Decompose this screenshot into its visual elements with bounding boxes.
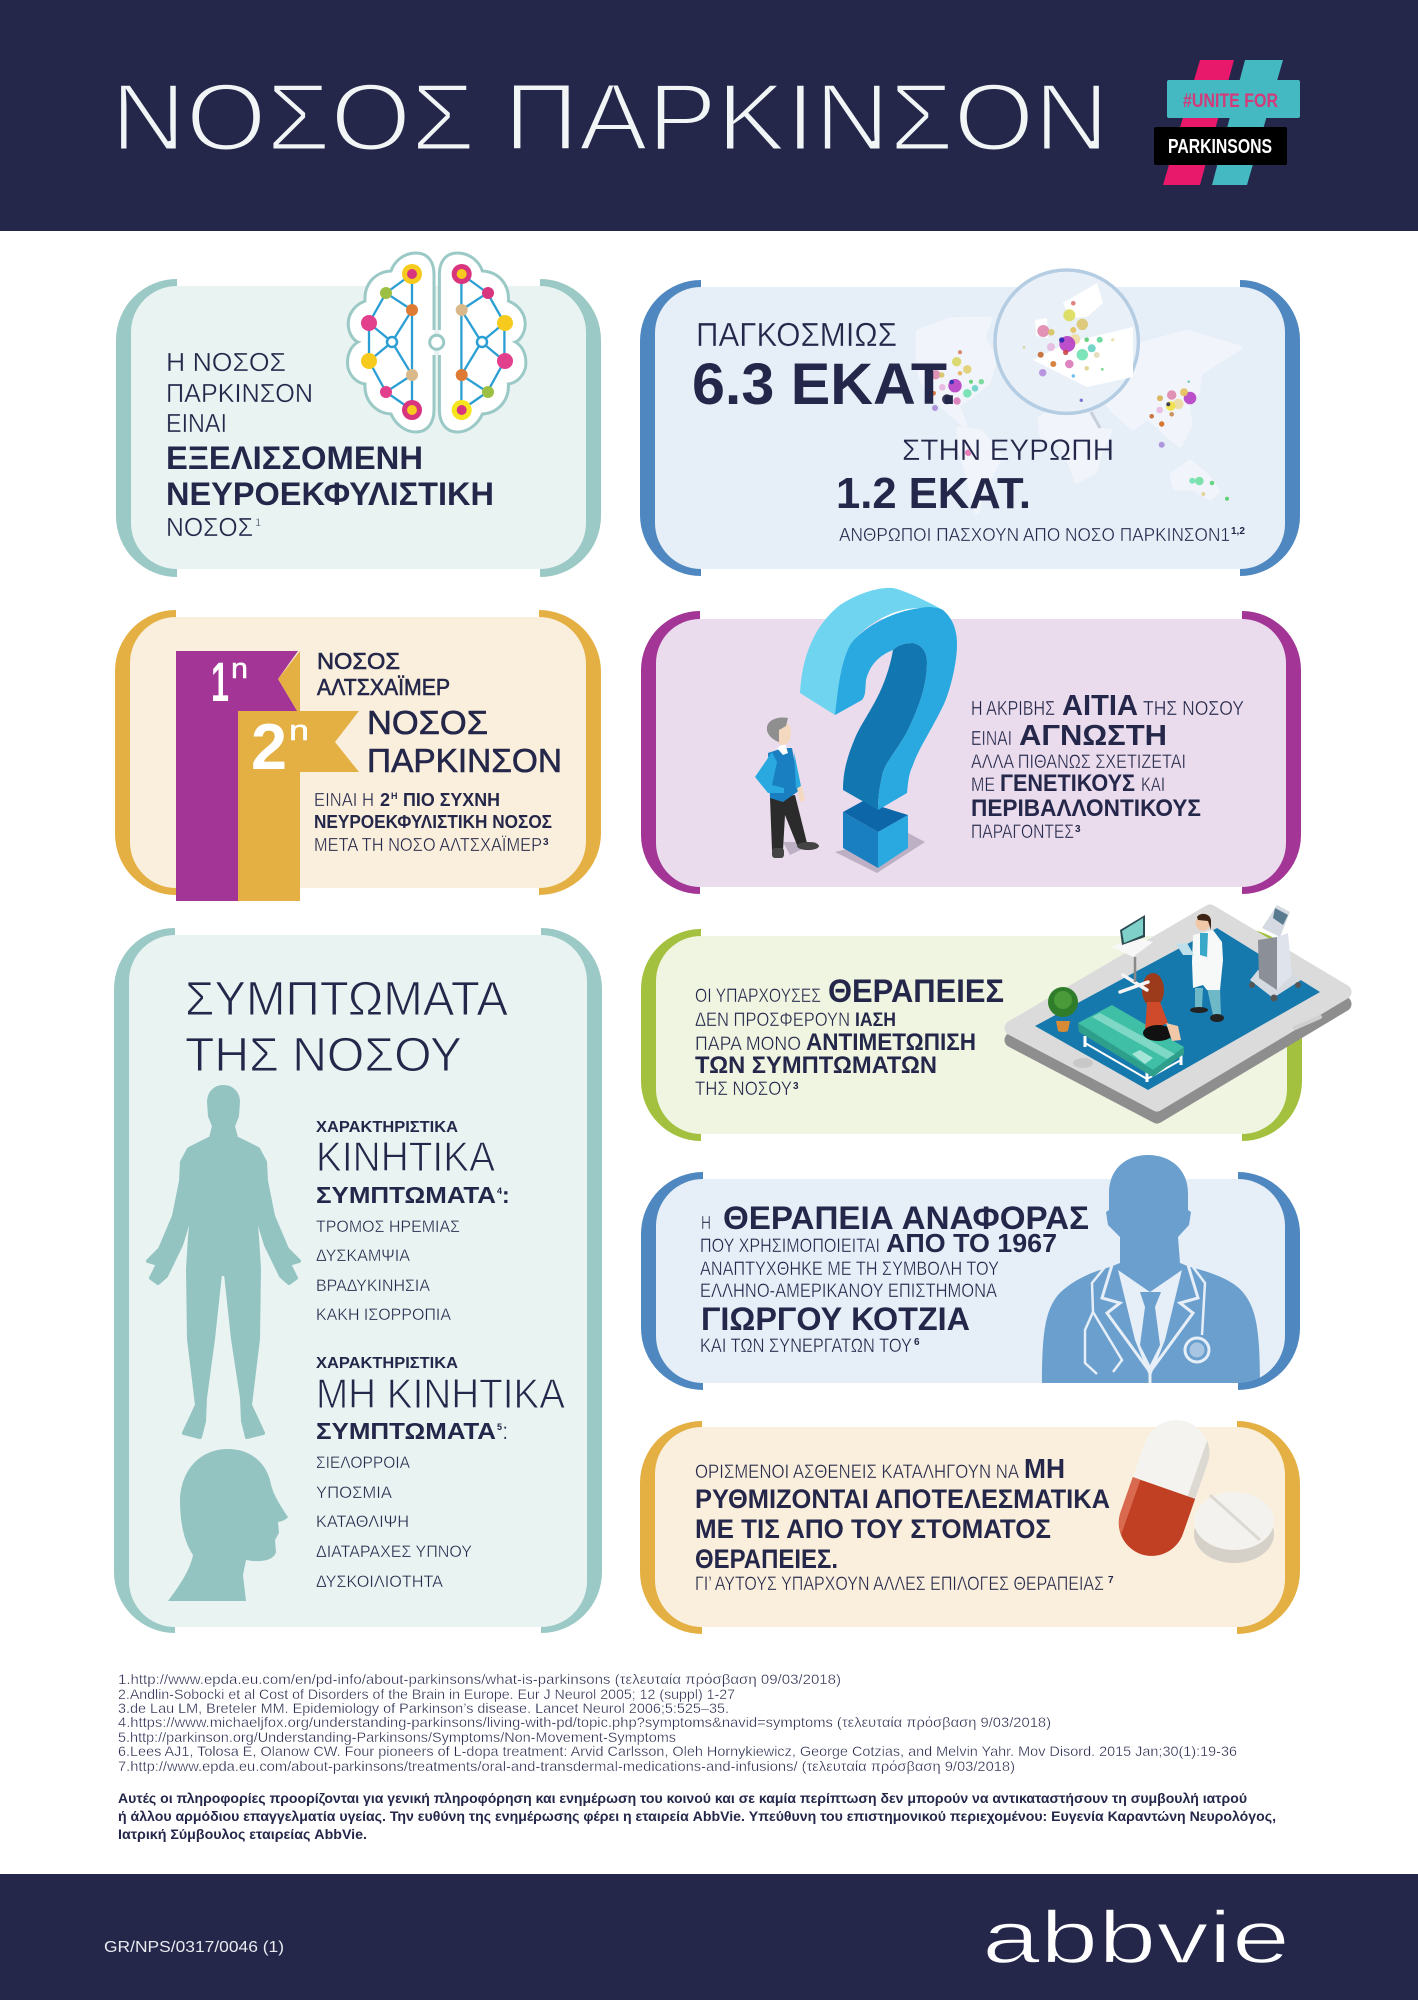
text block: prevalence figures: 6.3 ΕΚΑΤ. — [692, 352, 957, 417]
icon: head profile silhouette — [168, 1449, 288, 1601]
icon: ranking ribbons 1st and 2nd — [176, 650, 359, 901]
icon: plant — [1048, 987, 1078, 1032]
text block: non-motor symptoms: ΥΠΟΣΜΙΑ — [316, 1483, 393, 1502]
text block: cause: ΓΕΝΕΤΙΚΟΥΣ — [1000, 770, 1135, 797]
heading: symptoms of the disease: ΣΥΜΠΤΩΜΑΤΑ — [185, 973, 508, 1026]
footer band — [0, 1874, 1418, 2000]
text block: non-motor symptoms — [316, 1355, 565, 1591]
text block: treatments: ΙΑΣΗ — [855, 1010, 896, 1031]
icon: medical device — [1249, 905, 1301, 1002]
text block: motor symptoms: ΧΑΡΑΚΤΗΡΙΣΤΙΚΑ — [316, 1119, 458, 1136]
references list: 6.Lees AJ1, Tolosa E, Olanow CW. Four pioneers of L-dopa treatment: Arvid Carlsson, Oleh Hornykiewicz, George Cotzias, and Melvin Yahr. Mov Disord. 2015 Jan;30(1):19-36 — [118, 1743, 1237, 1759]
text block: motor symptoms: 4 — [497, 1186, 502, 1196]
text block: disease description: ΕΙΝΑΙ — [166, 408, 227, 438]
text block: disease ranks: ΝΕΥΡΟΕΚΦΥΛΙΣΤΙΚΗ ΝΟΣΟΣ — [314, 812, 552, 832]
logo: unite for parkinsons hashtag — [1154, 60, 1300, 185]
panel: current treatments — [641, 905, 1344, 1141]
text block: disease ranks: ΠΑΡΚΙΝΣΟΝ — [367, 742, 562, 779]
logo: unite for parkinsons hashtag: PARKINSONS — [1168, 136, 1272, 158]
text block: non-motor symptoms: ΧΑΡΑΚΤΗΡΙΣΤΙΚΑ — [316, 1355, 458, 1372]
text block: oral therapy: ΟΡΙΣΜΕΝΟΙ ΑΣΘΕΝΕΙΣ ΚΑΤΑΛΗΓΟΥΝ ΝΑ — [695, 1462, 1019, 1483]
text block: reference therapy: Η — [701, 1213, 711, 1233]
text block: disease description — [166, 347, 494, 542]
text block: motor symptoms: ΚΙΝΗΤΙΚΑ — [316, 1133, 495, 1180]
panel: global prevalence — [640, 270, 1300, 576]
text block: reference therapy: ΓΙΩΡΓΟΥ ΚΟΤΖΙΑ — [701, 1301, 970, 1337]
icon: ranking ribbons 1st and 2nd: n — [231, 653, 248, 685]
text block: oral therapy: ΜΕ ΤΙΣ ΑΠΟ ΤΟΥ ΣΤΟΜΑΤΟΣ — [695, 1514, 1051, 1544]
icon: capsule — [1110, 1411, 1218, 1565]
text block: disease description: ΝΟΣΟΣ — [166, 512, 253, 542]
text block: reference therapy: ΑΠΟ ΤΟ 1967 — [886, 1228, 1057, 1258]
icon: brain network — [348, 253, 526, 432]
text block: disease ranks: ΑΛΤΣΧΑΪΜΕΡ — [317, 674, 450, 700]
disclaimer text: Αυτές οι πληροφορίες προορίζονται για γενική πληροφόρηση και ενημέρωση του κοινού και σε καμία περίπτωση δεν μπορούν να αντικαταστήσουν τη συμβουλή ιατρού — [118, 1790, 1247, 1806]
text block: treatments: ΔΕΝ ΠΡΟΣΦΕΡΟΥΝ — [695, 1010, 850, 1031]
text block: treatments: ΤΗΣ ΝΟΣΟΥ — [695, 1079, 792, 1100]
icon: giant question mark on block — [800, 588, 957, 873]
icon: tablet pill — [1194, 1492, 1274, 1563]
heading: symptoms of the disease: ΤΗΣ ΝΟΣΟΥ — [185, 1029, 462, 1082]
text block: treatments — [695, 973, 1004, 1100]
text block: reference therapy: ΕΛΛΗΝΟ-ΑΜΕΡΙΚΑΝΟΥ ΕΠΙΣΤΗΜΟΝΑ — [700, 1281, 997, 1302]
text block: treatments: 3 — [793, 1081, 799, 1092]
title: ΝΟΣΟΣ ΠΑΡΚΙΝΣΟΝ — [111, 64, 1109, 171]
text block: cause: ΜΕ — [971, 775, 995, 796]
text block: oral therapy: ΘΕΡΑΠΕΙΕΣ. — [695, 1544, 838, 1574]
panel: progressive neurodegenerative disease — [116, 253, 601, 577]
header band — [0, 0, 1418, 231]
text block: non-motor symptoms: ΜΗ ΚΙΝΗΤΙΚΑ — [316, 1370, 565, 1417]
text block: reference therapy: 6 — [914, 1337, 920, 1348]
text block: cause: ΑΛΛΑ ΠΙΘΑΝΩΣ ΣΧΕΤΙΖΕΤΑΙ — [971, 752, 1186, 773]
text block: treatments: ΘΕΡΑΠΕΙΕΣ — [828, 973, 1004, 1009]
text block: cause: ΑΙΤΙΑ — [1062, 690, 1138, 722]
text block: prevalence figures: 1.2 ΕΚΑΤ. — [836, 469, 1031, 518]
text block: disease ranks: ΝΟΣΟΣ — [367, 704, 488, 741]
text block: oral therapy: ΡΥΘΜΙΖΟΝΤΑΙ ΑΠΟΤΕΛΕΣΜΑΤΙΚΑ — [695, 1484, 1110, 1514]
text block: oral therapy: 7 — [1108, 1575, 1114, 1586]
text block: cause: ΤΗΣ ΝΟΣΟΥ — [1143, 698, 1244, 720]
text block: motor symptoms: : — [502, 1182, 510, 1208]
icon: ranking ribbons 1st and 2nd: 1 — [211, 650, 229, 713]
text block: disease description: ΝΕΥΡΟΕΚΦΥΛΙΣΤΙΚΗ — [166, 476, 494, 512]
text block: prevalence figures — [692, 316, 1245, 545]
references list: 1.http://www.epda.eu.com/en/pd-info/about-parkinsons/what-is-parkinsons (τελευταία πρόσβαση 09/03/2018) — [118, 1671, 841, 1687]
text block: motor symptoms: ΒΡΑΔΥΚΙΝΗΣΙΑ — [316, 1276, 431, 1295]
icon: man looking up — [755, 717, 819, 858]
text block: non-motor symptoms: ΣΙΕΛΟΡΡΟΙΑ — [316, 1453, 411, 1472]
text block: treatments: ΟΙ ΥΠΑΡΧΟΥΣΕΣ — [695, 986, 821, 1007]
text block: non-motor symptoms: : — [502, 1418, 508, 1444]
text block: cause: ΠΑΡΑΓΟΝΤΕΣ — [971, 822, 1074, 843]
icon: doctor silhouette with stethoscope — [1042, 1155, 1260, 1383]
text block: motor symptoms: ΚΑΚΗ ΙΣΟΡΡΟΠΙΑ — [316, 1305, 452, 1324]
icon: magnifier lens over europe — [995, 270, 1138, 428]
references list: 4.https://www.michaeljfox.org/understanding-parkinsons/living-with-pd/topic.php?symptoms&navid=symptoms (τελευταία πρόσβαση 9/03/2018) — [118, 1714, 1051, 1730]
text block: motor symptoms: ΤΡΟΜΟΣ ΗΡΕΜΙΑΣ — [316, 1217, 460, 1236]
text block: disease ranks: Η — [391, 791, 398, 801]
chart: world map with prevalence dots — [918, 270, 1240, 512]
references list: 3.de Lau LM, Breteler MM. Epidemiology of Parkinson’s disease. Lancet Neurol 2006;5:525–35. — [118, 1700, 729, 1716]
text block: oral therapy: ΓΙ’ ΑΥΤΟΥΣ ΥΠΑΡΧΟΥΝ ΑΛΛΕΣ ΕΠΙΛΟΓΕΣ ΘΕΡΑΠΕΙΑΣ — [695, 1574, 1104, 1595]
icon: human body silhouette — [148, 1087, 299, 1437]
text block: reference therapy: ΠΟΥ ΧΡΗΣΙΜΟΠΟΙΕΙΤΑΙ — [700, 1236, 880, 1257]
references list: 7.http://www.epda.eu.com/about-parkinsons/treatments/oral-and-transdermal-medications-and-infusions/ (τελευταία πρόσβαση 9/03/2018) — [118, 1758, 1015, 1774]
references list — [118, 1671, 1237, 1774]
text block: reference therapy: ΘΕΡΑΠΕΙΑ ΑΝΑΦΟΡΑΣ — [723, 1200, 1089, 1236]
text block: non-motor symptoms: ΚΑΤΑΘΛΙΨΗ — [316, 1512, 409, 1531]
icon: monitor cart — [1112, 915, 1153, 992]
text block: disease description: Η ΝΟΣΟΣ — [166, 347, 286, 377]
text block: non-motor symptoms: 5 — [497, 1422, 502, 1432]
text block: oral therapy: ΜΗ — [1024, 1453, 1065, 1484]
text block: disease ranks: ΝΟΣΟΣ — [317, 648, 400, 674]
heading: symptoms of the disease — [185, 973, 508, 1082]
icon: treatment bed — [1078, 1005, 1184, 1082]
text block: cause: ΚΑΙ — [1141, 775, 1165, 796]
text block: cause — [971, 690, 1244, 843]
panel: oral therapy limitation — [640, 1411, 1300, 1634]
text block: cause: ΠΕΡΙΒΑΛΛΟΝΤΙΚΟΥΣ — [971, 795, 1201, 822]
text block: prevalence figures: ΑΝΘΡΩΠΟΙ ΠΑΣΧΟΥΝ ΑΠΟ ΝΟΣΟ ΠΑΡΚΙΝΣΟΝ1 — [839, 525, 1230, 545]
icon: ranking ribbons 1st and 2nd: n — [289, 715, 309, 747]
text block: disease description: 1 — [255, 517, 261, 529]
text block: prevalence figures: ΣΤΗΝ ΕΥΡΩΠΗ — [902, 434, 1114, 467]
panel: reference therapy — [641, 1155, 1300, 1390]
text block: prevalence figures: ΠΑΓΚΟΣΜΙΩΣ — [696, 316, 897, 353]
text block: disease ranks: 3 — [543, 837, 549, 848]
text block: disease ranks: ΜΕΤΑ ΤΗ ΝΟΣΟ ΑΛΤΣΧΑΪΜΕΡ — [314, 835, 542, 855]
references list: 2.Andlin-Sobocki et al Cost of Disorders of the Brain in Europe. Eur J Neurol 2005; 12 (suppl) 1-27 — [118, 1686, 735, 1702]
text block: treatments: ΠΑΡΑ ΜΟΝΟ — [695, 1034, 801, 1055]
icon: isometric tablet clinic scene — [1012, 905, 1344, 1116]
text block: motor symptoms: ΣΥΜΠΤΩΜΑΤΑ — [316, 1182, 496, 1208]
text block: reference therapy: ΚΑΙ ΤΩΝ ΣΥΝΕΡΓΑΤΩΝ ΤΟΥ — [700, 1336, 912, 1357]
text block: cause: Η ΑΚΡΙΒΗΣ — [971, 698, 1055, 720]
logo: unite for parkinsons hashtag: #UNITE FOR — [1183, 91, 1278, 112]
text block: non-motor symptoms: ΔΙΑΤΑΡΑΧΕΣ ΥΠΝΟΥ — [316, 1542, 472, 1561]
document code: GR/NPS/0317/0046 (1) — [104, 1939, 284, 1956]
panel: symptoms — [114, 928, 602, 1633]
text block: non-motor symptoms: ΔΥΣΚΟΙΛΙΟΤΗΤΑ — [316, 1572, 444, 1591]
text block: disease ranks — [314, 648, 562, 855]
text block: treatments: ΑΝΤΙΜΕΤΩΠΙΣΗ — [806, 1029, 976, 1056]
text block: motor symptoms: ΔΥΣΚΑΜΨΙΑ — [316, 1246, 411, 1265]
disclaimer text: Ιατρική Σύμβουλος εταιρείας AbbVie. — [118, 1826, 367, 1842]
text block: motor symptoms — [316, 1119, 510, 1324]
icon: ranking ribbons 1st and 2nd: 2 — [251, 710, 287, 783]
text block: cause: ΑΓΝΩΣΤΗ — [1019, 720, 1167, 752]
text block: disease description: ΕΞΕΛΙΣΣΟΜΕΝΗ — [166, 440, 423, 476]
text block: cause: 3 — [1075, 824, 1081, 835]
icon: doctor — [1176, 914, 1224, 1022]
logo: abbvie: abbvie — [982, 1896, 1290, 1979]
text block: treatments: ΤΩΝ ΣΥΜΠΤΩΜΑΤΩΝ — [695, 1052, 937, 1079]
references list: 5.http://parkinson.org/Understanding-Parkinsons/Symptoms/Non-Movement-Symptoms — [118, 1729, 676, 1745]
text block: disease description: ΠΑΡΚΙΝΣΟΝ — [166, 378, 313, 408]
text block: prevalence figures: 1,2 — [1231, 526, 1245, 537]
text block: oral therapy — [695, 1453, 1114, 1595]
text block: reference therapy: ΑΝΑΠΤΥΧΘΗΚΕ ΜΕ ΤΗ ΣΥΜΒΟΛΗ ΤΟΥ — [700, 1259, 999, 1280]
panel: second most common neurodegenerative disease — [115, 610, 601, 901]
text block: non-motor symptoms: ΣΥΜΠΤΩΜΑΤΑ — [316, 1418, 496, 1444]
text block: disease ranks: ΠΙΟ ΣΥΧΝΗ — [403, 790, 500, 810]
text block: disease ranks: 2 — [380, 790, 390, 810]
disclaimer text: ή άλλου αρμόδιου επαγγελματία υγείας. Την ευθύνη της ενημέρωσης φέρει η εταιρεία AbbVie. Υπεύθυνη του επιστημονικού περιεχομένου: Ευγενία Καραντώνη Νευρολόγος, — [118, 1808, 1276, 1824]
disclaimer text — [118, 1790, 1276, 1842]
icon: seated patient — [1142, 973, 1181, 1041]
text block: cause: ΕΙΝΑΙ — [971, 728, 1012, 750]
text block: reference therapy — [700, 1200, 1089, 1357]
text block: disease ranks: ΕΙΝΑΙ Η — [314, 790, 374, 810]
panel: unknown cause — [641, 588, 1301, 894]
